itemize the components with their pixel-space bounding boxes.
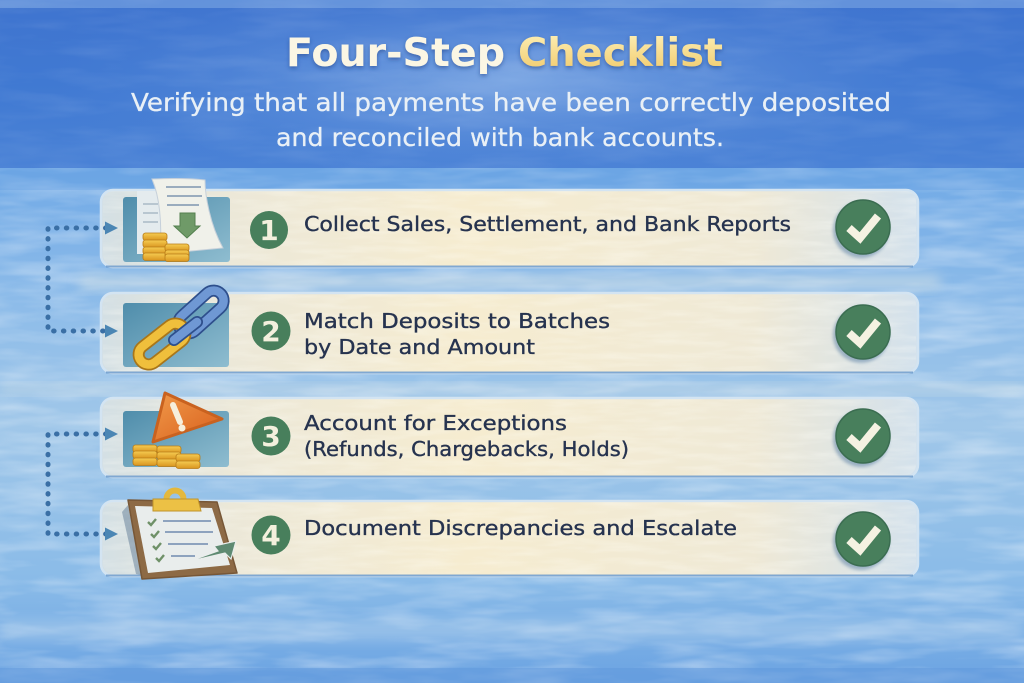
badge: number 4: 4 <box>261 519 281 552</box>
icon: chain link <box>123 287 229 369</box>
badge: number 1 <box>250 211 288 249</box>
panel: step 2 <box>101 287 918 374</box>
title: Four-Step <box>286 31 505 76</box>
step 3 text: Account for Exceptions <box>304 411 567 435</box>
badge: number 1: 1 <box>259 214 279 247</box>
title: Checklist <box>518 31 723 76</box>
step 4 text: Document Discrepancies and Escalate <box>304 516 737 540</box>
step 3 text <box>304 411 629 461</box>
step 2 text <box>304 309 610 359</box>
badge: number 3 <box>252 416 290 456</box>
icon: check 1 <box>833 200 890 258</box>
step 3 text: (Refunds, Chargebacks, Holds) <box>304 437 629 461</box>
subtitle <box>131 88 891 152</box>
subtitle: Verifying that all payments have been correctly deposited <box>131 88 891 117</box>
icon: check 2 <box>833 305 890 363</box>
icon: check 4 <box>833 512 890 570</box>
icon: document with coins <box>123 178 230 262</box>
badge: number 2: 2 <box>261 315 281 348</box>
panel: step 4 <box>101 490 918 579</box>
title <box>286 31 723 76</box>
panel: step 1 <box>101 178 918 268</box>
badge: number 2 <box>252 312 290 350</box>
badge: number 4 <box>252 516 290 554</box>
connector: steps 1 to 2 <box>48 222 118 338</box>
icon: warning flag with coins <box>123 393 229 468</box>
icon: clipboard with arrow <box>122 490 237 579</box>
step 2 text: Match Deposits to Batches <box>304 309 610 333</box>
step 1 text: Collect Sales, Settlement, and Bank Reports <box>304 212 791 236</box>
step 2 text: by Date and Amount <box>304 335 535 359</box>
subtitle: and reconciled with bank accounts. <box>276 123 724 152</box>
panel: step 3 <box>101 393 918 478</box>
connector: steps 3 to 4 <box>48 428 118 540</box>
icon: check 3 <box>833 409 890 467</box>
badge: number 3: 3 <box>261 420 281 453</box>
